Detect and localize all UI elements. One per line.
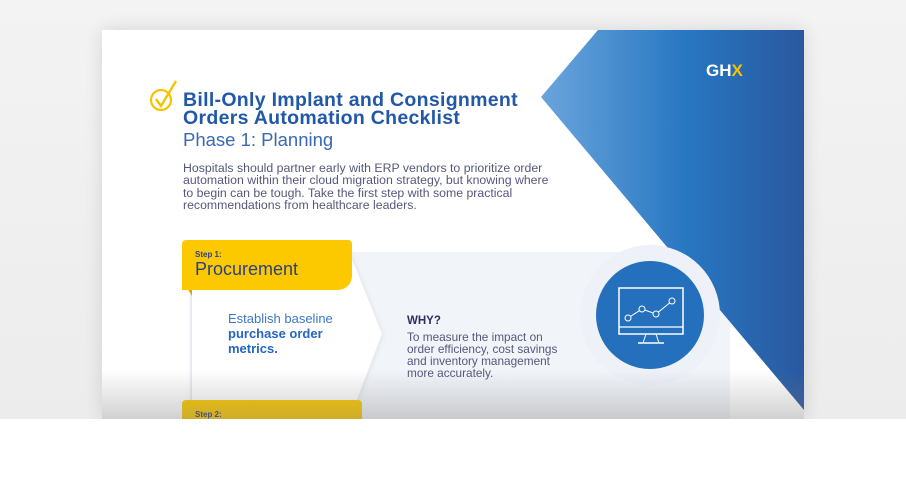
step 1 tag: [182, 240, 352, 296]
title: [183, 89, 518, 129]
white lower area: [0, 419, 906, 481]
why text: To measure the impact on: [407, 330, 543, 344]
title: Orders Automation Checklist: [183, 107, 460, 129]
why text: WHY?: [407, 315, 441, 327]
action text: purchase order: [228, 326, 323, 341]
icon: checkmark: [150, 80, 177, 112]
step 2 tag: [182, 400, 362, 440]
intro text: Hospitals should partner early with ERP vendors to prioritize order: [183, 161, 542, 175]
icon: monitor circle: [580, 245, 720, 385]
blue triangle decoration: [541, 30, 804, 410]
intro text: to begin can be tough. Take the first step with some practical: [183, 186, 512, 200]
why text: and inventory management: [407, 354, 550, 368]
subtitle: Phase 1: Planning: [183, 129, 333, 150]
action text: Establish baseline: [228, 311, 333, 326]
step 2 tag: Step 2:: [195, 410, 222, 419]
intro text: recommendations from healthcare leaders.: [183, 198, 417, 212]
action text: [228, 311, 333, 356]
why text: order efficiency, cost savings: [407, 342, 557, 356]
intro text: automation within their cloud migration strategy, but knowing where: [183, 173, 548, 187]
intro text: [183, 161, 548, 212]
action text: metrics.: [228, 341, 278, 356]
panel: step 1 background: [190, 252, 730, 422]
why text: more accurately.: [407, 366, 493, 380]
step 1 tag: Procurement: [195, 259, 298, 279]
step 1 tag: Step 1:: [195, 250, 222, 259]
bottom fade: [102, 370, 804, 420]
page card: [102, 30, 804, 420]
title: Bill-Only Implant and Consignment: [183, 89, 518, 111]
logo: GHX: GHX: [706, 61, 743, 80]
white chevron card: [190, 258, 382, 400]
why text: [407, 315, 557, 380]
